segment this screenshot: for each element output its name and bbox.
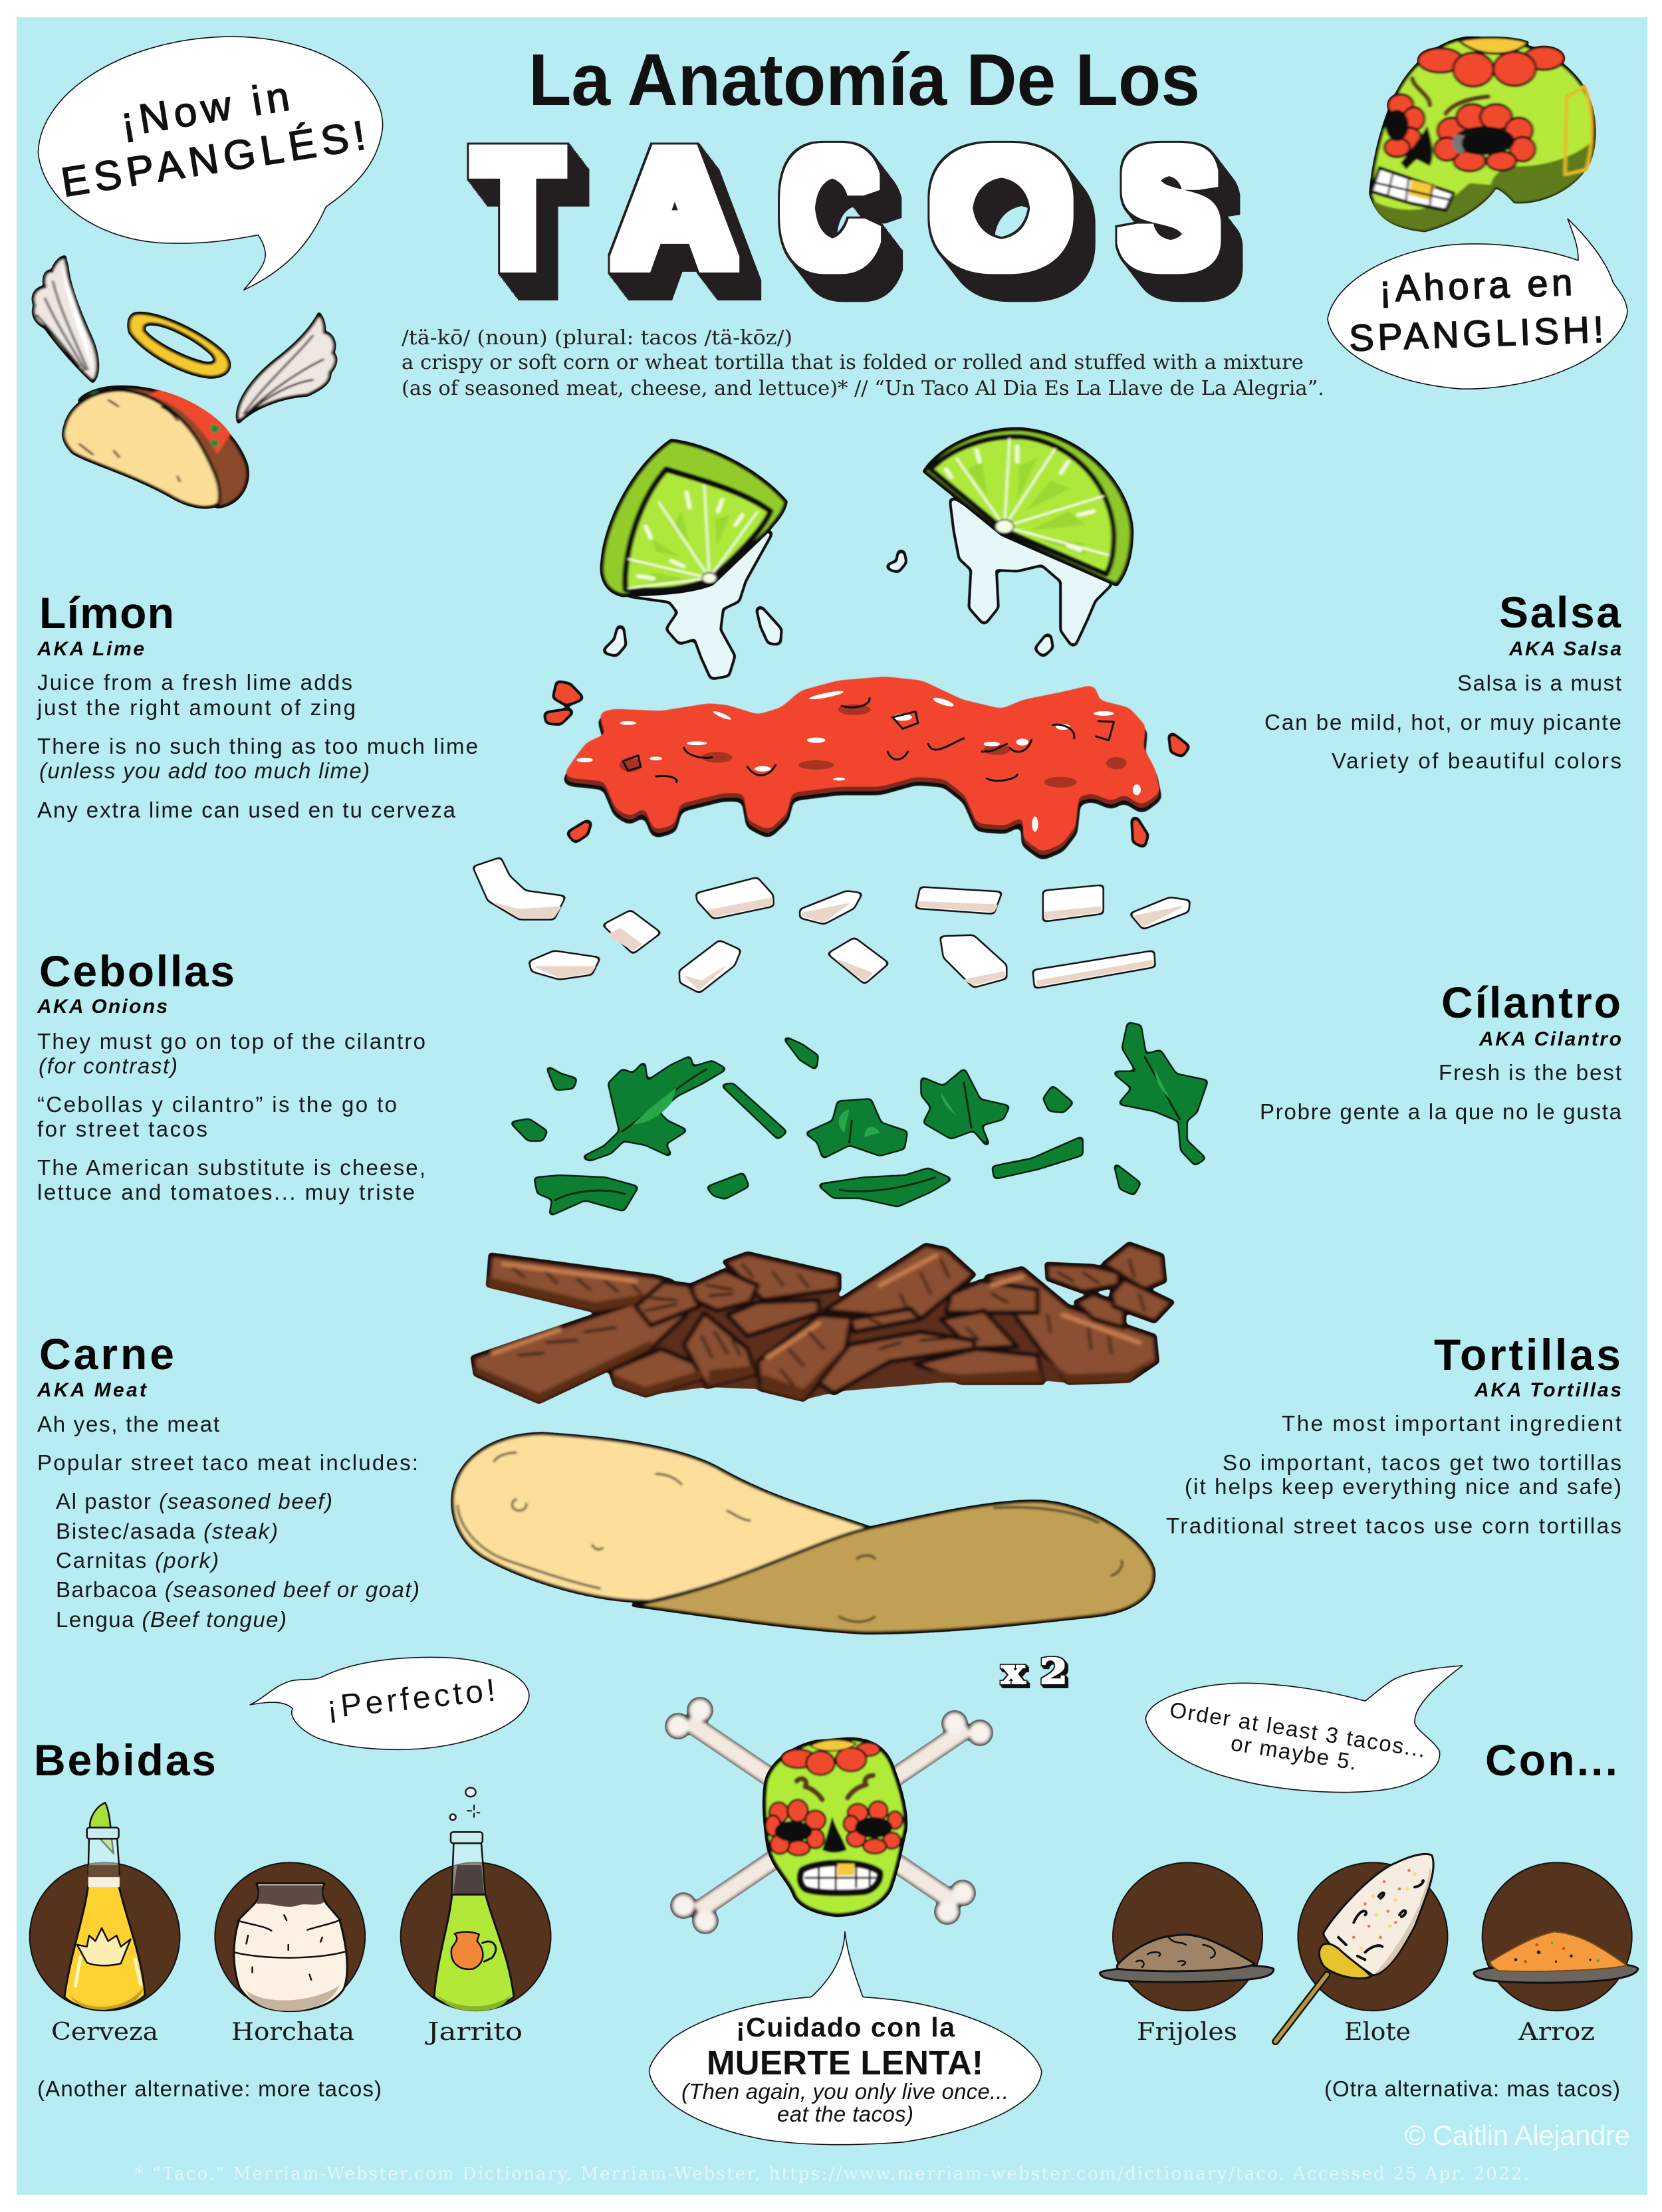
big title: TACOS: O <box>930 118 1073 299</box>
left text: limon: Juice from a fresh lime adds <box>37 670 352 695</box>
drink labels: Jarrito <box>424 2019 523 2046</box>
heading: con: Con... <box>1485 1735 1617 1785</box>
right text: tortillas: The most important ingredient <box>1282 1411 1621 1436</box>
soda bottle <box>434 1832 514 2011</box>
right text: tortillas: So important, tacos get two tortillas <box>1223 1450 1621 1475</box>
left text: limon: just the right amount of zing <box>37 695 356 720</box>
right text: salsa: Can be mild, hot, or muy picante <box>1264 710 1621 734</box>
drink labels <box>51 2019 523 2046</box>
side: frijoles <box>1100 1862 1274 2011</box>
right text: tortillas: (it helps keep everything nice and safe) <box>1185 1474 1621 1499</box>
speech bubble: ahora en spanglish: ¡Ahora en <box>1378 261 1573 310</box>
note: another alternative: (Another alternative: more tacos) <box>37 2076 382 2101</box>
right text: cilantro: Cílantro <box>1441 978 1621 1027</box>
drink: horchata <box>215 1862 365 2011</box>
drink: jarrito <box>401 1788 551 2011</box>
icon: left wing <box>33 257 98 382</box>
rice <box>1490 1932 1627 1971</box>
left text: cebollas: Cebollas <box>39 946 235 996</box>
side: elote <box>1276 1854 1447 2042</box>
left text: cebollas: They must go on top of the cilantro <box>37 1029 425 1053</box>
illustration: salsa <box>548 681 1185 853</box>
speech bubble: order at least 3 tacos: or maybe 5. <box>1229 1730 1358 1775</box>
salsa blob <box>570 681 1155 853</box>
speech bubble: now in espanglés: ESPANGLÉS! <box>58 112 369 206</box>
salsa droplets <box>548 685 1185 843</box>
speech bubble: cuidado con la muerte lenta: (Then again, you only live once... <box>681 2079 1009 2104</box>
big title: TACOS: S <box>1121 118 1219 300</box>
icon: sugar skull top right <box>1371 38 1594 231</box>
speech bubble: ahora en spanglish <box>1328 219 1627 389</box>
lime juice drips <box>608 534 903 675</box>
right text: salsa: Variety of beautiful colors <box>1332 748 1621 773</box>
illustration: tortillas <box>453 1434 1154 1633</box>
left text: carne: Ah yes, the meat <box>37 1412 219 1436</box>
left text: limon: (unless you add too much lime) <box>39 758 370 783</box>
crossbones <box>665 1697 993 1934</box>
speech bubble: ahora en spanglish: SPANGLISH! <box>1348 308 1604 359</box>
speech bubble: order at least 3 tacos: Order at least 3 tacos... <box>1168 1697 1427 1762</box>
beer bottle <box>64 1828 145 2010</box>
right text: salsa <box>1264 588 1621 773</box>
right text: tortillas: Traditional street tacos use corn tortillas <box>1166 1513 1621 1538</box>
left text: carne: Al pastor (seasoned beef) <box>56 1489 332 1513</box>
note: otra alternativa: (Otra alternativa: mas tacos) <box>1324 2076 1620 2101</box>
onion pieces <box>475 859 1188 991</box>
horchata jar <box>234 1884 347 2011</box>
left text: limon: There is no such thing as too much lime <box>37 734 478 758</box>
speech bubble: cuidado con la muerte lenta: MUERTE LENTA! <box>707 2044 983 2082</box>
stick <box>1276 1975 1327 2042</box>
speech bubble: cuidado con la muerte lenta: eat the tacos) <box>777 2102 913 2126</box>
side: arroz <box>1474 1862 1638 2011</box>
skull <box>765 1739 905 1915</box>
left text: cebollas: lettuce and tomatoes... muy triste <box>37 1180 415 1204</box>
side labels: Elote <box>1344 2019 1411 2046</box>
left text: cebollas: for street tacos <box>37 1117 207 1141</box>
lime juice drips <box>953 502 1108 653</box>
lime wedge <box>602 441 786 596</box>
speech bubble: order at least 3 tacos <box>1145 1666 1463 1793</box>
left text: carne: Popular street taco meat includes: <box>37 1450 418 1475</box>
side labels <box>1137 2019 1595 2046</box>
beans <box>1117 1935 1254 1971</box>
speech bubble: now in espanglés <box>38 37 383 290</box>
left text: cebollas: The American substitute is cheese, <box>37 1155 425 1180</box>
drink: cerveza <box>30 1803 179 2011</box>
drink labels: Horchata <box>231 2019 354 2046</box>
right text: cilantro: Fresh is the best <box>1439 1060 1621 1085</box>
definition text: (as of seasoned meat, cheese, and lettuce)* // “Un Taco Al Dia Es La Llave de La Alegria”. <box>402 377 1324 400</box>
corn tip <box>1319 1943 1371 1978</box>
footnote: * “Taco.” Merriam-Webster.com Dictionary, Merriam-Webster, https://www.merriam-webster.com/dictionary/taco. Accessed 25 Apr. 2022. <box>135 2164 1529 2184</box>
side labels: Arroz <box>1518 2019 1595 2046</box>
corn cob <box>1323 1854 1433 1975</box>
illustration: right lime wedge <box>925 429 1131 653</box>
icon: right wing <box>237 314 336 422</box>
drink labels: Cerveza <box>51 2019 158 2046</box>
left text: carne: Carne <box>39 1329 174 1379</box>
big title: TACOS: A <box>614 117 736 299</box>
right text: salsa: Salsa <box>1499 588 1621 637</box>
big title: TACOS: T <box>475 118 561 300</box>
speech bubble: cuidado con la muerte lenta: ¡Cuidado con la <box>736 2012 955 2043</box>
big title: TACOS <box>475 117 1219 300</box>
left text: cebollas: (for contrast) <box>39 1053 178 1078</box>
left text: cebollas <box>37 946 425 1204</box>
soda bubbles <box>450 1788 479 1820</box>
left text: cebollas: AKA Onions <box>37 996 168 1018</box>
left text: limon <box>37 588 478 822</box>
speech bubble: now in espanglés: ¡Now in <box>117 74 293 146</box>
illustration: chopped onions <box>475 859 1188 991</box>
left text: limon: AKA Lime <box>37 638 144 660</box>
right text: salsa: AKA Salsa <box>1508 638 1621 660</box>
illustration: left lime wedge <box>602 441 903 675</box>
left text: limon: Límon <box>39 588 174 637</box>
right text: cilantro <box>1260 978 1622 1124</box>
left text: carne: AKA Meat <box>37 1379 148 1401</box>
lime wedge garnish <box>90 1803 114 1854</box>
left text: carne: Lengua (Beef tongue) <box>56 1607 287 1632</box>
icon: taco <box>63 387 247 507</box>
heading: bebidas: Bebidas <box>34 1735 216 1785</box>
plate <box>1100 1965 1274 1982</box>
left text: cebollas: “Cebollas y cilantro” is the go to <box>37 1092 397 1117</box>
left text: carne: Carnitas (pork) <box>56 1548 219 1573</box>
illustration: cilantro <box>513 1024 1205 1213</box>
definition text: a crispy or soft corn or wheat tortilla that is folded or rolled and stuffed with a mixture <box>402 351 1304 374</box>
big title: TACOS: C <box>782 118 877 300</box>
lime wedge <box>925 429 1131 584</box>
left text: limon: Any extra lime can used en tu cerveza <box>37 798 456 822</box>
speech bubble: perfecto: ¡Perfecto! <box>325 1673 497 1725</box>
side labels: Frijoles <box>1137 2019 1237 2046</box>
definition text: /tä-kō/ (noun) (plural: tacos /tä-kōz/) <box>402 326 792 350</box>
left text: carne: Barbacoa (seasoned beef or goat) <box>56 1577 419 1602</box>
cilantro leaves <box>513 1024 1205 1213</box>
pitcher <box>451 1932 483 1969</box>
plate <box>1474 1963 1638 1983</box>
speech bubble: cuidado con la muerte lenta <box>650 1932 1042 2145</box>
right text: salsa: Salsa is a must <box>1457 671 1621 695</box>
copyright: © Caitlin Alejandre <box>1405 2120 1630 2151</box>
right text: tortillas: AKA Tortillas <box>1474 1379 1621 1401</box>
left text: carne <box>37 1329 419 1632</box>
multiplier: x 2: x 2 <box>1001 1652 1068 1692</box>
right text: tortillas <box>1166 1330 1621 1538</box>
left text: carne: Bistec/asada (steak) <box>56 1519 278 1543</box>
icon: halo <box>129 313 229 377</box>
crown <box>77 1928 130 1965</box>
right text: cilantro: AKA Cilantro <box>1479 1028 1621 1050</box>
definition text <box>402 326 1324 400</box>
right text: cilantro: Probre gente a la que no le gusta <box>1260 1099 1622 1124</box>
title: La Anatomía De Los <box>529 39 1200 121</box>
icon: flying taco with halo and wings <box>33 257 336 507</box>
illustration: carne <box>473 1244 1173 1402</box>
right text: tortillas: Tortillas <box>1434 1330 1621 1379</box>
illustration: skull and crossbones <box>665 1697 993 1934</box>
speech bubble: perfecto <box>250 1657 529 1749</box>
